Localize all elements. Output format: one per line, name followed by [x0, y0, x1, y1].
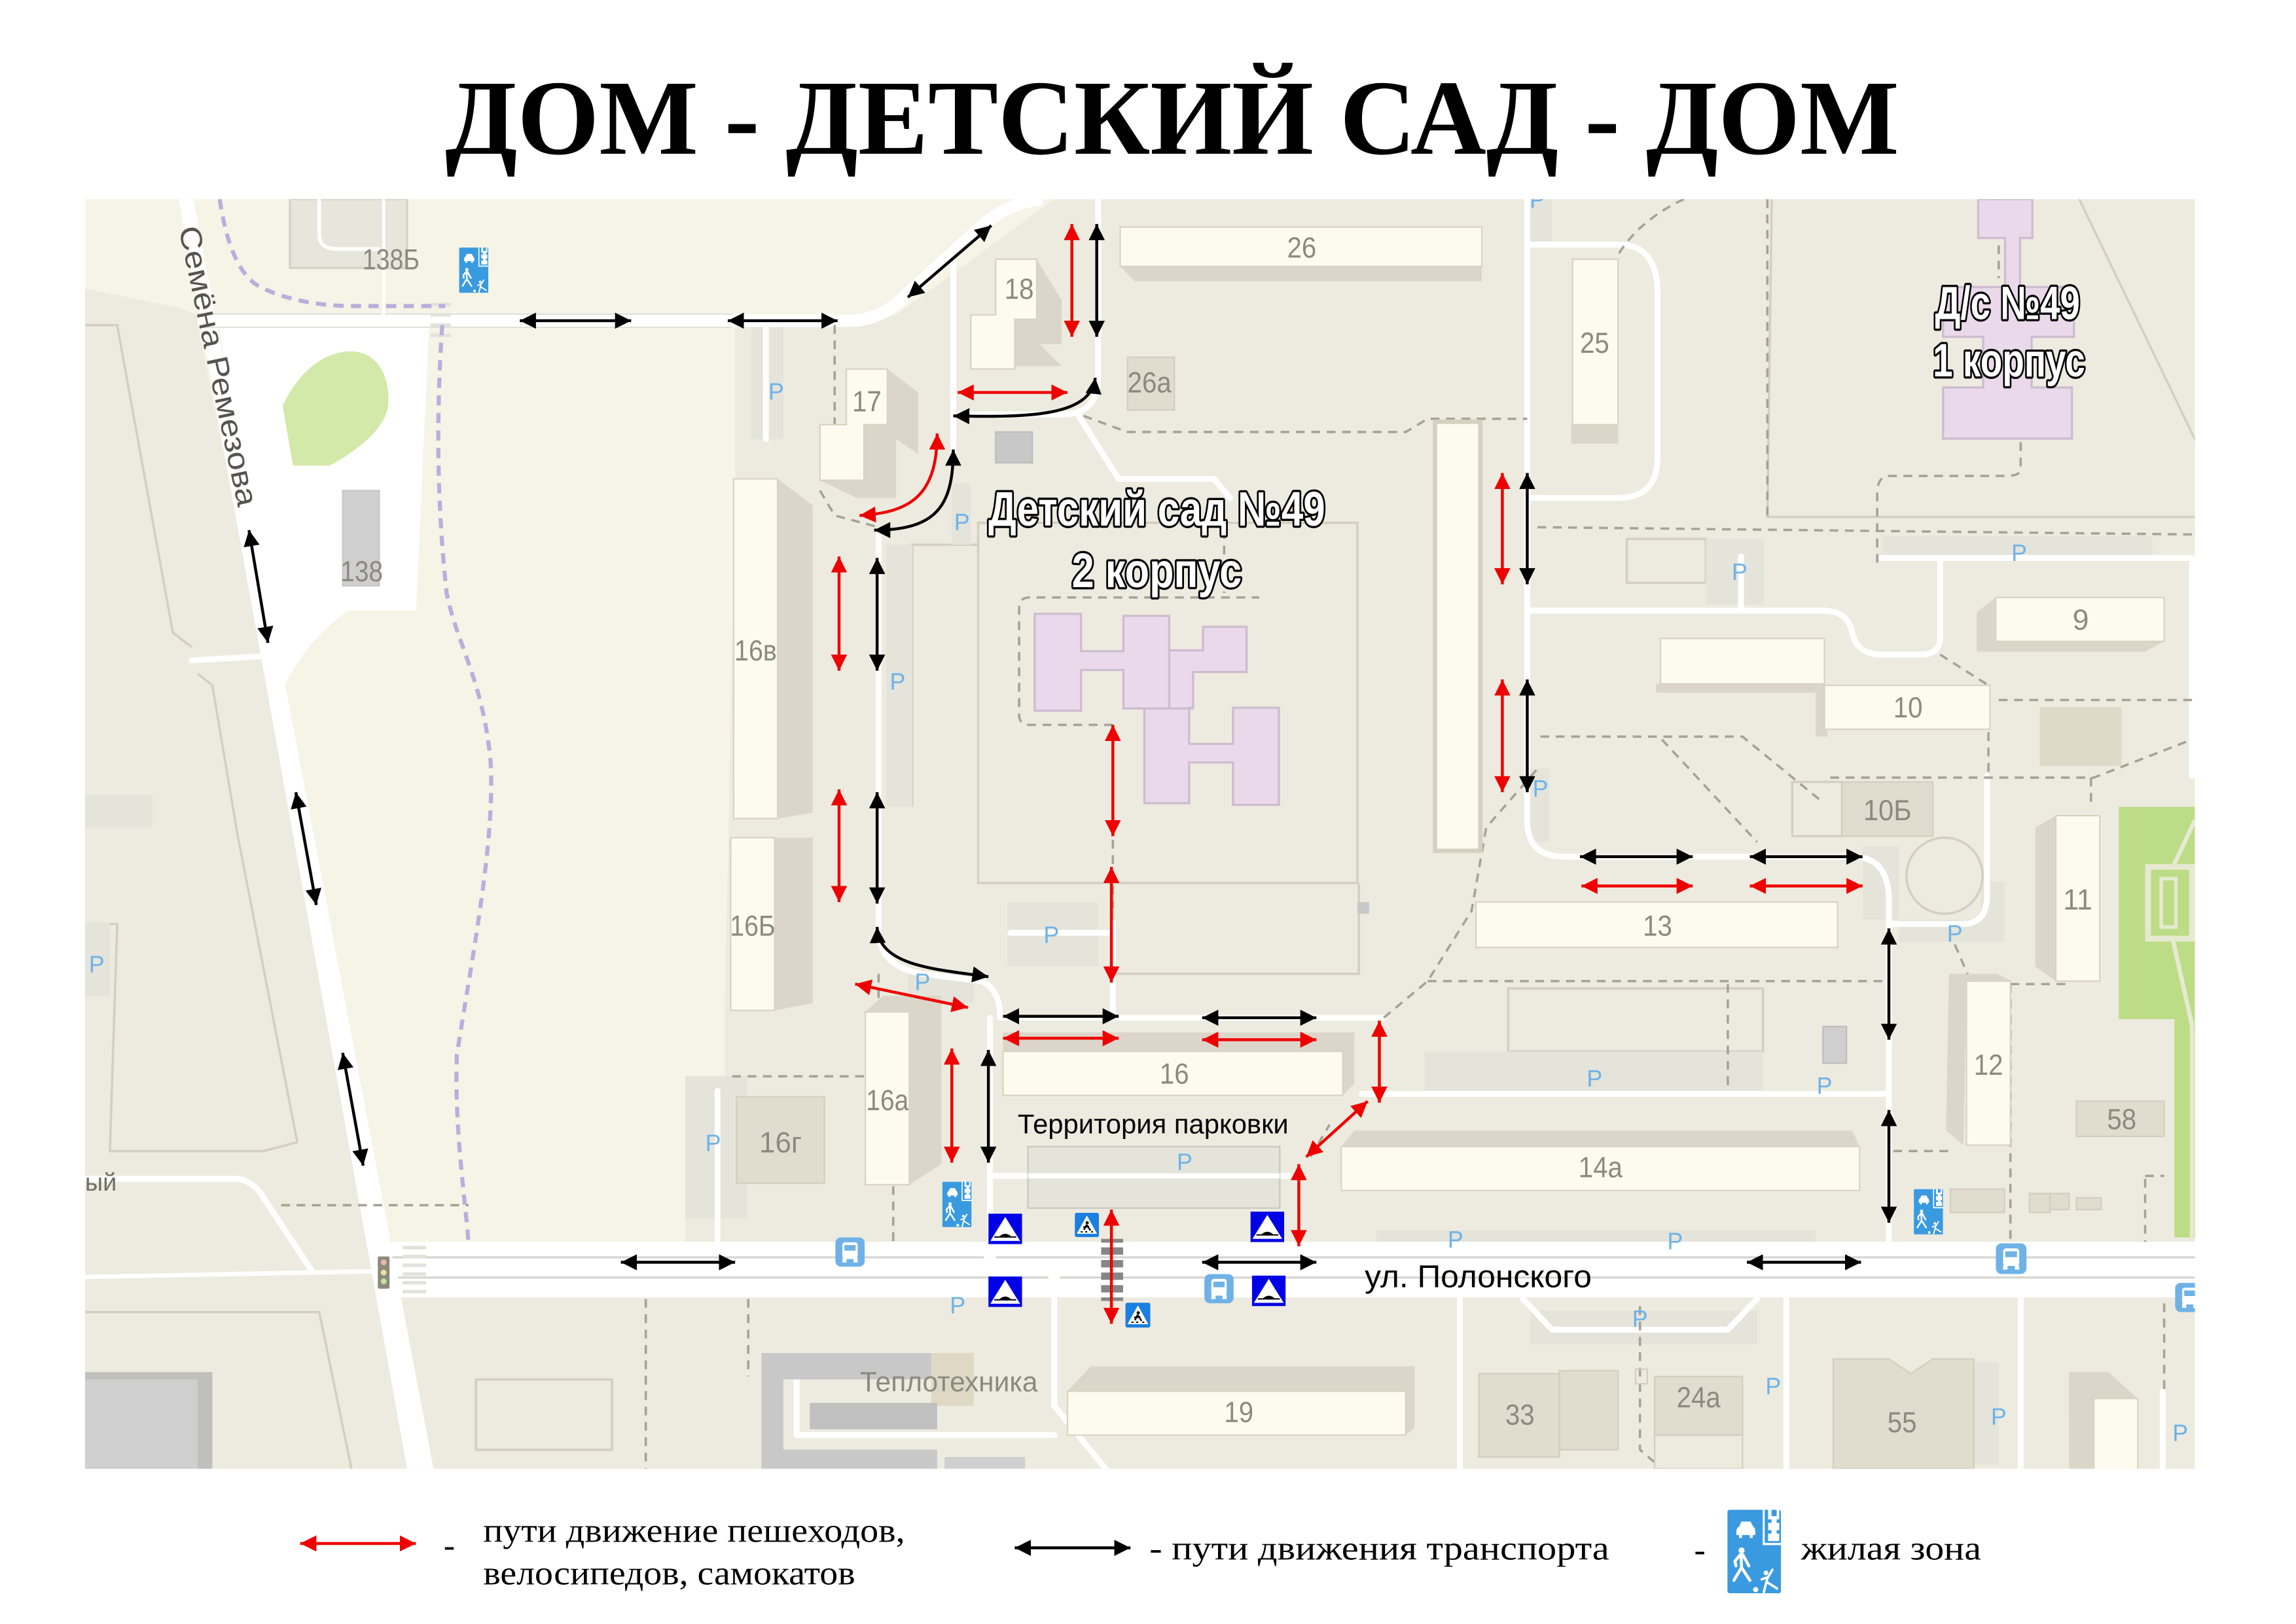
parking labels: P — [1732, 559, 1748, 585]
parking labels: P — [1587, 1066, 1602, 1092]
building 18: 18 — [1005, 272, 1034, 305]
building 19 — [1067, 1366, 1414, 1435]
building 16г — [736, 1097, 825, 1183]
building 26 — [1120, 227, 1482, 281]
building 13: 13 — [1643, 910, 1672, 943]
building Теплотехника — [761, 1353, 1038, 1469]
label: Детский сад №49 2 корпус — [988, 482, 1325, 598]
traffic light — [378, 1256, 389, 1289]
building 18 — [971, 259, 1062, 369]
green park — [2119, 807, 2195, 1237]
building 138Б — [290, 199, 420, 325]
building 26а — [1128, 357, 1174, 410]
building 24а — [1636, 1369, 1742, 1469]
icon: pedestrian crossing signs — [1075, 1213, 1151, 1327]
pedestrian route arrows — [839, 224, 1863, 1324]
technical building — [996, 432, 1032, 463]
building 10Б: 10Б — [1863, 794, 1912, 827]
building 16Б — [730, 838, 813, 1011]
building 17 — [820, 369, 918, 498]
small garages — [1357, 902, 2101, 1212]
long building — [1435, 422, 1480, 851]
building 10Б — [1792, 782, 1933, 836]
parking labels: P — [2011, 540, 2027, 566]
parking labels: P — [1947, 920, 1963, 947]
building 16 — [1003, 1032, 1354, 1095]
building 19: 19 — [1224, 1396, 1253, 1428]
building 55 — [1833, 1359, 1974, 1469]
building 12: 12 — [1974, 1049, 2003, 1081]
transport route arrows — [249, 224, 1889, 1262]
parking labels: P — [768, 379, 784, 405]
icon: speed bump signs — [988, 1212, 1285, 1307]
legend: pedestrian route: - — [444, 1527, 455, 1564]
roads — [85, 199, 2199, 1469]
building 26: 26 — [1287, 232, 1316, 264]
parking labels: P — [1632, 1306, 1648, 1332]
parking labels: P — [1533, 776, 1548, 802]
building 14а — [1341, 1130, 1859, 1191]
grey building bottom left — [85, 1372, 212, 1469]
parking labels: P — [1667, 1228, 1683, 1254]
building 55: 55 — [1888, 1406, 1917, 1439]
building Теплотехника: Теплотехника — [860, 1367, 1038, 1398]
building 138Б: 138Б — [363, 244, 420, 276]
building 26а: 26а — [1128, 367, 1172, 399]
parking labels: P — [706, 1130, 721, 1156]
parking labels: P — [954, 509, 970, 535]
building 58: 58 — [2107, 1103, 2136, 1136]
pedestrian crossing stripes — [1101, 1239, 1123, 1301]
parking territory — [1028, 1147, 1280, 1208]
plaza near building 138 — [220, 327, 429, 696]
building 9: 9 — [2073, 604, 2089, 636]
parking labels: P — [1530, 187, 1545, 213]
parking labels: P — [950, 1293, 965, 1319]
parking labels: P — [1765, 1373, 1781, 1399]
parking territory label: Территория парковки — [1018, 1110, 1289, 1140]
legend: residential zone: - — [1694, 1532, 1706, 1569]
legend: residential zone — [1694, 1510, 1981, 1593]
green lawn — [283, 352, 389, 465]
building 14а: 14а — [1579, 1151, 1623, 1184]
legend: pedestrian route — [300, 1513, 905, 1593]
building 10: 10 — [1893, 691, 1922, 724]
kindergarten 1 building — [1943, 199, 2074, 439]
building 10 — [1816, 685, 1990, 736]
panel: map — [85, 187, 2204, 1471]
parking labels: P — [89, 951, 105, 977]
building 16а: 16а — [866, 1084, 908, 1117]
building 11 — [2036, 816, 2100, 981]
footpaths — [281, 199, 2195, 1469]
building 12 — [1946, 974, 2012, 1145]
parking labels: P — [890, 669, 905, 695]
parking labels — [89, 187, 2188, 1446]
legend: pedestrian route: пути движение пешеходов, — [483, 1513, 905, 1550]
legend: residential zone: жилая зона — [1801, 1530, 1981, 1568]
street name: Семёна Ремезова: Семёна Ремезова — [172, 223, 265, 509]
label: Д/с №49 1 корпус: 1 корпус — [1933, 334, 2085, 387]
label: Д/с №49 1 корпус: Д/с №49 — [1935, 278, 2080, 330]
building 13 — [1476, 902, 1838, 947]
street fragment label: ый — [85, 1169, 117, 1197]
label: Детский сад №49 2 корпус: Детский сад №49 — [988, 482, 1325, 536]
building 16: 16 — [1160, 1057, 1189, 1090]
building 138 — [340, 490, 383, 588]
parking labels: P — [1448, 1227, 1463, 1253]
building 24а: 24а — [1677, 1381, 1721, 1414]
building 33 — [1479, 1371, 1618, 1457]
label: Детский сад №49 2 корпус: 2 корпус — [1072, 543, 1242, 598]
icon: bus stops — [835, 1237, 2204, 1312]
building 16в — [734, 479, 813, 819]
purple cycle path — [220, 199, 491, 1245]
parking labels: P — [1817, 1073, 1833, 1099]
building 21 — [2069, 1372, 2138, 1471]
building 17: 17 — [852, 386, 882, 418]
parking labels: P — [1043, 922, 1059, 948]
parking labels: P — [1177, 1149, 1193, 1175]
building 16в: 16в — [734, 634, 777, 667]
building 138: 138 — [340, 555, 383, 588]
building 11: 11 — [2063, 883, 2092, 916]
building 58 — [2076, 1101, 2164, 1136]
kindergarten 2 building — [1035, 614, 1279, 805]
building 16а — [865, 996, 942, 1185]
building 16Б: 16Б — [730, 910, 776, 943]
icon: residential zone signs on map — [459, 247, 1943, 1235]
parking labels: P — [1991, 1404, 2007, 1430]
parking labels: P — [2172, 1420, 2188, 1446]
label: Д/с №49 1 корпус — [1933, 278, 2085, 387]
parking labels: P — [915, 969, 930, 995]
building 25 — [1571, 259, 1618, 444]
legend: pedestrian route: велосипедов, самокатов — [483, 1555, 855, 1593]
street name: ул. Полонского: ул. Полонского — [1365, 1259, 1592, 1294]
enclosure outlines — [85, 199, 2195, 1469]
building 9 — [1977, 598, 2164, 652]
building 33: 33 — [1505, 1399, 1535, 1432]
square plot — [2039, 708, 2122, 766]
unnumbered building — [1656, 638, 1825, 693]
building 16г: 16г — [759, 1127, 802, 1159]
building 25: 25 — [1580, 327, 1609, 359]
title: ДОМ - ДЕТСКИЙ САД - ДОМ — [445, 59, 1899, 177]
legend: transport route: - пути движения транспорта — [1149, 1530, 1609, 1568]
